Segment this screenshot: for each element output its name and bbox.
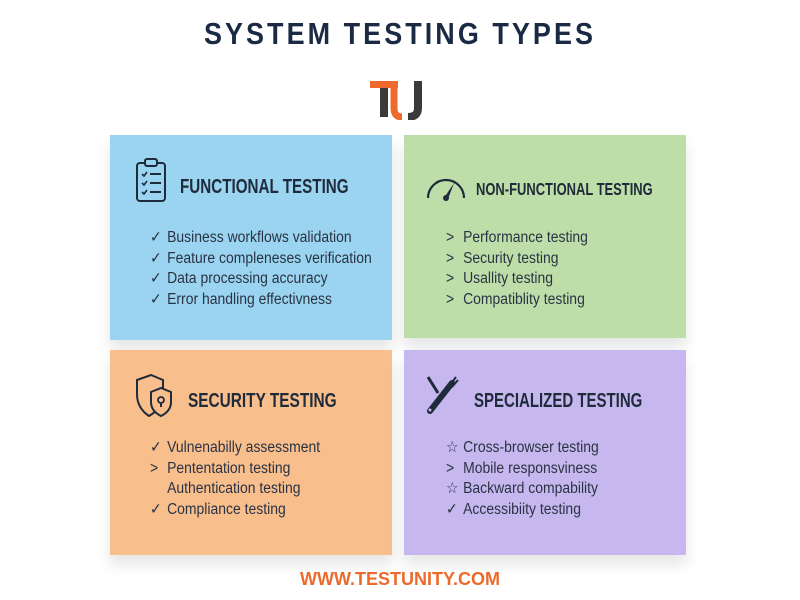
list: > xyxy=(446,290,454,308)
heading: SECURITY TESTING xyxy=(188,390,337,412)
list xyxy=(150,229,372,308)
heading: SPECIALIZED TESTING xyxy=(474,390,642,412)
list: Error handling effectivness xyxy=(167,290,332,308)
list: ✓ xyxy=(150,500,162,518)
logo xyxy=(370,81,422,120)
list: Performance testing xyxy=(463,229,588,246)
list: ✓ xyxy=(150,250,162,266)
list: Authentication testing xyxy=(167,480,300,497)
icon: gauge xyxy=(426,178,466,201)
list: ✓ xyxy=(150,229,162,246)
list xyxy=(446,229,588,308)
list: Accessibiity testing xyxy=(463,500,581,518)
list: ☆ xyxy=(446,480,459,497)
list: ✓ xyxy=(150,270,162,287)
list: Compliance testing xyxy=(167,500,286,518)
list: Pententation testing xyxy=(167,460,290,476)
list: > xyxy=(446,270,454,287)
title: SYSTEM TESTING TYPES xyxy=(204,16,596,51)
list: Compatiblity testing xyxy=(463,290,585,308)
icon: shields xyxy=(136,374,172,418)
list: ☆ xyxy=(446,439,459,456)
list: ✓ xyxy=(446,500,458,518)
list: Usallity testing xyxy=(463,270,553,287)
footer url: WWW.TESTUNITY.COM xyxy=(300,569,500,589)
panel: functional testing xyxy=(110,135,392,340)
list: Security testing xyxy=(463,250,558,266)
list: ✓ xyxy=(150,290,162,308)
list: Cross-browser testing xyxy=(463,439,599,456)
panel: non-functional testing xyxy=(404,135,686,338)
panel: specialized testing xyxy=(404,350,686,555)
list: ✓ xyxy=(150,439,162,456)
list: Vulnenabilly assessment xyxy=(167,439,320,456)
list: Business workflows validation xyxy=(167,229,352,246)
heading: NON-FUNCTIONAL TESTING xyxy=(476,179,653,199)
icon: tools xyxy=(426,376,459,414)
list: > xyxy=(446,229,454,246)
list: Data processing accuracy xyxy=(167,270,328,287)
list xyxy=(446,439,599,518)
list: Backward compability xyxy=(463,480,598,497)
list: > xyxy=(446,250,454,266)
list: Feature compleneses verification xyxy=(167,250,372,266)
panel: security testing xyxy=(110,350,392,555)
list xyxy=(150,439,320,518)
list: > xyxy=(150,460,158,476)
icon: clipboard xyxy=(136,158,166,202)
list: > xyxy=(446,460,454,476)
list: Mobile responsviness xyxy=(463,460,597,476)
heading: FUNCTIONAL TESTING xyxy=(180,176,349,198)
